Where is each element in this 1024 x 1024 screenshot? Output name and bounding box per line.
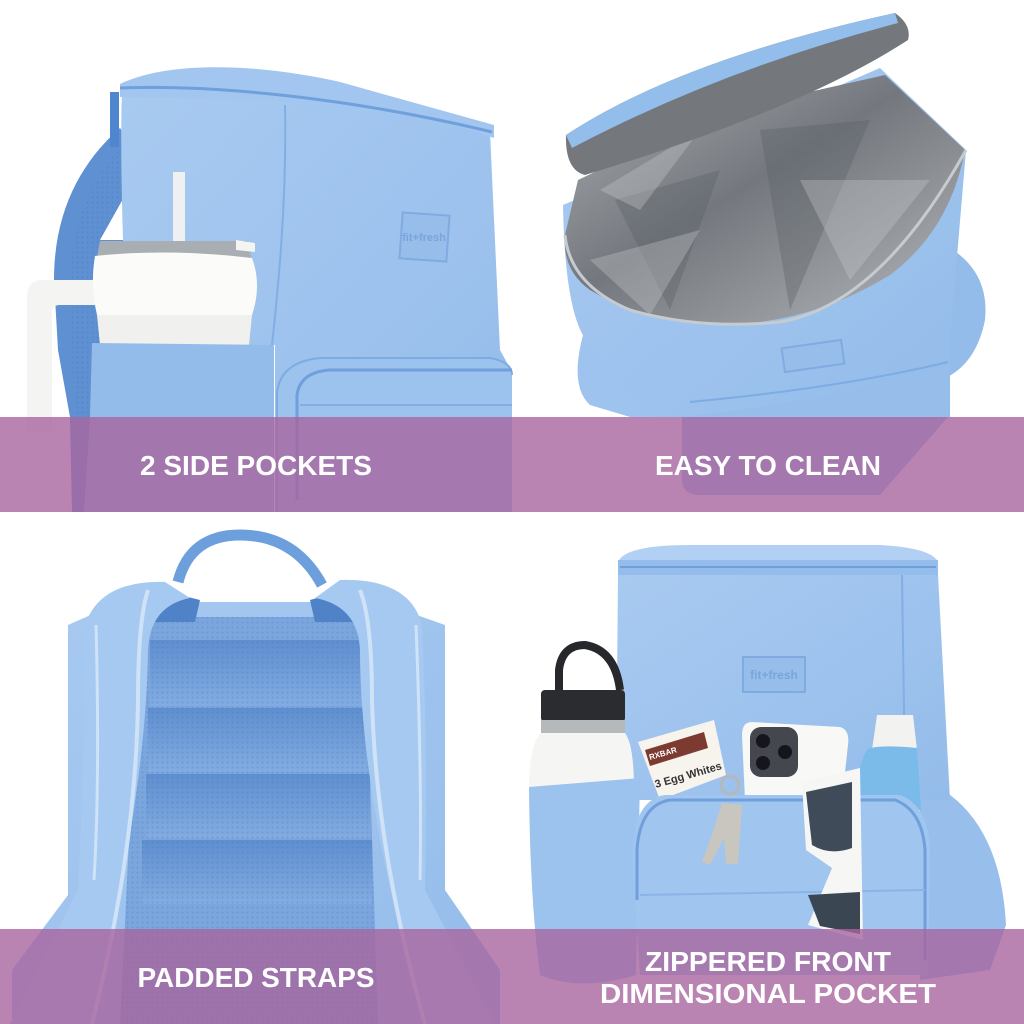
lid <box>120 67 494 138</box>
keys <box>702 776 742 865</box>
side pocket right <box>920 778 1006 980</box>
banner: padded straps <box>0 929 512 1024</box>
side pocket <box>84 343 274 512</box>
phone <box>742 722 848 800</box>
logo patch: fit+fresh <box>402 232 446 244</box>
strap top mesh patches <box>150 590 200 622</box>
right strap <box>315 580 495 1024</box>
banner: zippered front dimensional pocket: DIMENSIONAL POCKET <box>600 978 936 1009</box>
panel: padded straps back view <box>10 535 500 1024</box>
silver interior <box>565 75 965 325</box>
banner: zippered front dimensional pocket <box>512 929 1024 1024</box>
panel: side pockets bag <box>27 67 512 512</box>
banner: zippered front dimensional pocket: ZIPPERED FRONT <box>645 946 891 977</box>
tumbler <box>27 240 257 417</box>
logo patch <box>399 212 450 262</box>
banner: 2 side pockets: 2 SIDE POCKETS <box>140 450 372 481</box>
protein bar: RXBAR <box>648 745 678 762</box>
sunglasses <box>802 768 863 940</box>
side pockets <box>935 245 986 382</box>
straw <box>173 172 185 247</box>
bottle <box>529 645 634 790</box>
protein bar <box>638 720 726 800</box>
outer bag <box>563 68 966 417</box>
logo patch <box>743 657 805 692</box>
mesh panel <box>120 617 378 1024</box>
bag body <box>121 92 512 512</box>
protein bar: 3 Egg Whites <box>654 760 723 791</box>
bag body <box>616 575 950 800</box>
spray bottle <box>857 715 921 810</box>
zipper pull <box>110 92 119 147</box>
front pocket <box>632 795 930 975</box>
mesh back strap <box>54 128 128 512</box>
left strap <box>10 582 190 1024</box>
banner: easy to clean <box>512 417 1024 512</box>
front pocket <box>277 358 512 512</box>
top handle <box>178 535 322 585</box>
logo patch <box>782 340 844 372</box>
banner: padded straps: PADDED STRAPS <box>138 962 374 993</box>
banner: 2 side pockets <box>0 417 512 512</box>
panel: zippered front pocket bag <box>529 545 1006 984</box>
panel: easy to clean open bag <box>563 13 986 495</box>
lid <box>566 13 909 175</box>
bag sides <box>12 602 500 1024</box>
gap behind bag <box>100 190 128 240</box>
banner: easy to clean: EASY TO CLEAN <box>655 450 881 481</box>
logo patch: fit+fresh <box>750 668 798 682</box>
left pocket <box>529 778 640 984</box>
